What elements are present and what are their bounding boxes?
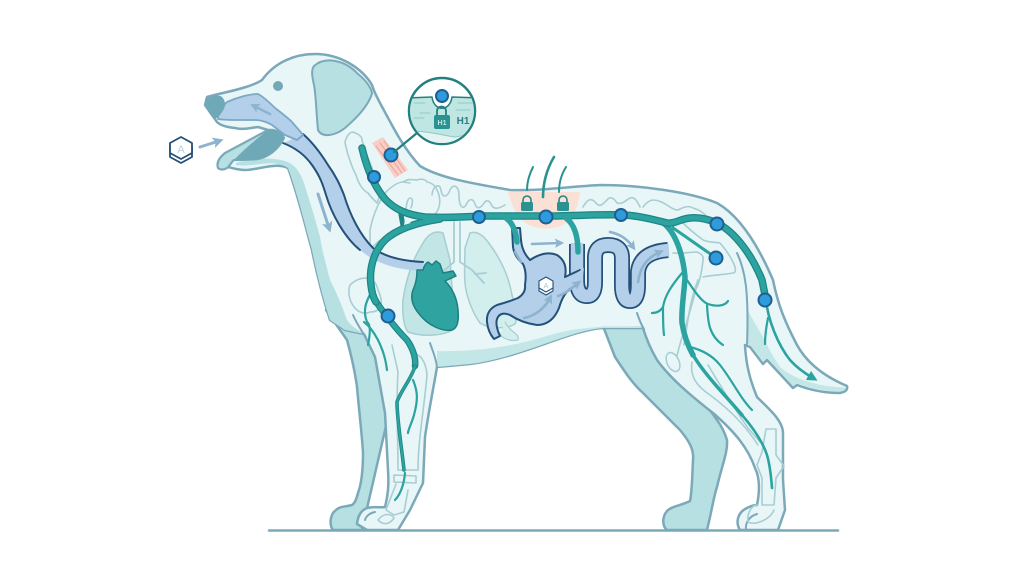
nose	[205, 96, 225, 119]
body contour lines	[353, 253, 757, 530]
dog body outline	[205, 54, 847, 530]
nasal cavity	[218, 94, 303, 140]
locks on skin	[521, 196, 569, 211]
callout: H1 receptor lock: H1	[438, 120, 447, 127]
rear lower leg bones	[692, 362, 758, 445]
hexagon allergen A outside	[170, 137, 192, 163]
fork link	[400, 209, 403, 226]
far rear leg	[603, 326, 727, 530]
main trunk	[362, 148, 766, 300]
front leg trunk	[373, 297, 415, 366]
eye	[273, 81, 283, 91]
tail shading	[747, 311, 845, 392]
hairs	[527, 157, 566, 197]
spine vertebrae	[432, 186, 505, 208]
throat and chest band	[236, 159, 364, 334]
lungs	[403, 222, 516, 335]
ground line	[269, 529, 838, 532]
hexagon allergen A in stomach: A	[544, 283, 549, 290]
kneecap	[663, 350, 683, 374]
far front leg	[326, 310, 392, 530]
hexagon allergen A outside: A	[177, 144, 185, 156]
front lower leg bones	[394, 475, 416, 483]
ear	[312, 60, 372, 135]
tongue and lower jaw	[217, 130, 284, 170]
upper arm bone	[349, 278, 381, 313]
pink muscle patch	[372, 137, 408, 178]
flow arrows	[200, 106, 660, 318]
stomach and intestine	[487, 228, 669, 341]
femur	[677, 280, 698, 356]
airway tube	[283, 134, 424, 271]
skeleton	[345, 132, 784, 524]
blue nodes	[368, 148, 772, 322]
infographic: dog anatomy diagram	[169, 52, 848, 532]
hexagon allergen A in stomach	[539, 277, 553, 295]
heart	[412, 261, 458, 330]
scapula	[370, 179, 440, 250]
front branch	[371, 219, 440, 302]
pelvis	[643, 200, 735, 277]
belly band	[437, 327, 643, 367]
callout: H1 receptor lock: H1	[457, 116, 470, 127]
gut branches	[506, 218, 517, 242]
neck vertebrae	[345, 132, 380, 203]
lymph nerve network	[362, 148, 813, 500]
callout connector	[394, 133, 417, 152]
callout: H1 receptor lock	[408, 76, 476, 146]
thin branches	[364, 228, 813, 500]
rear leg trunk	[662, 222, 693, 355]
pink skin patch	[508, 192, 580, 229]
